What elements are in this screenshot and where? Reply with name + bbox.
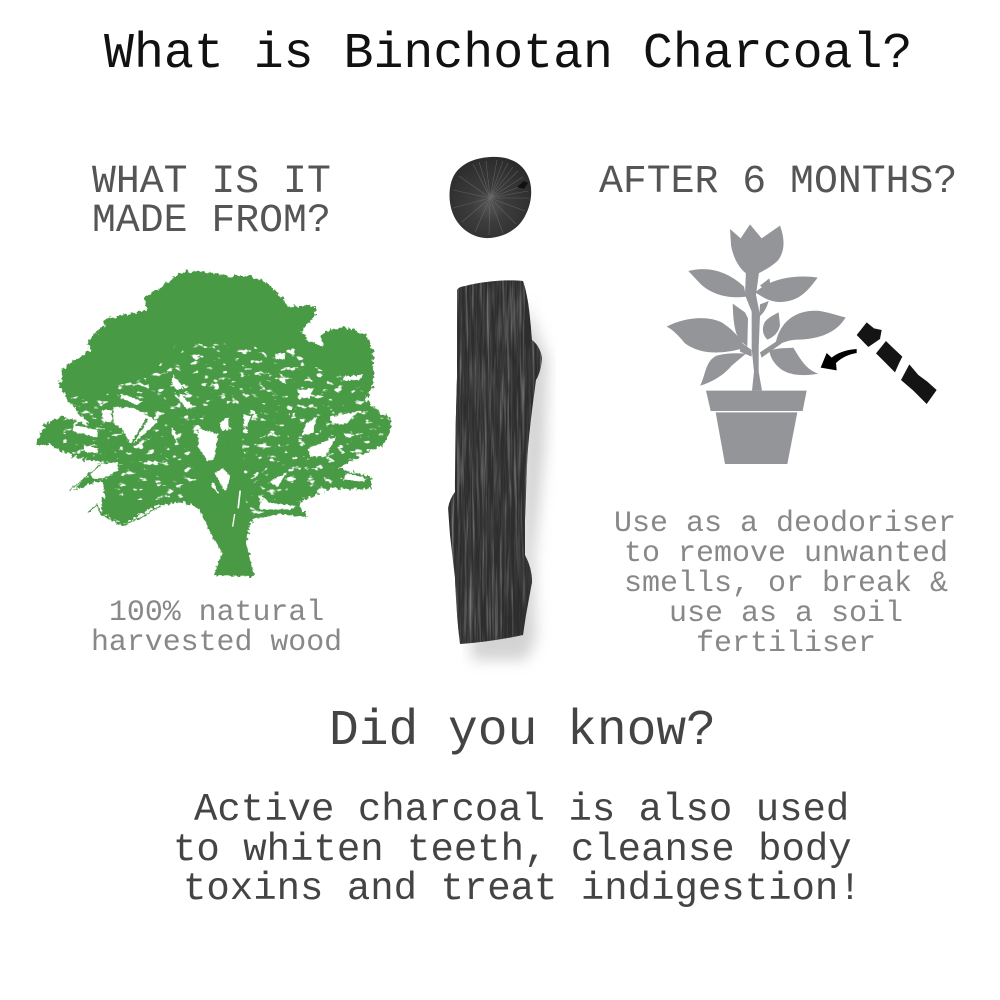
heading: did you know: Did you know? [329,703,716,759]
caption: uses after 6 months: use as a soil [669,597,903,631]
caption: natural wood [91,595,342,659]
text block: did you know fact: to whiten teeth, cleanse body [173,828,852,872]
caption: natural wood: harvested wood [91,625,342,659]
caption: uses after 6 months: smells, or break & [624,567,948,601]
plant: leaves [688,269,746,297]
plant: stem [745,270,762,391]
tree: trunk [200,507,254,576]
text block: did you know fact: Active charcoal is also used [194,788,849,832]
tree: white gaps between branches [60,328,367,527]
plant: pot body [716,412,797,464]
disc: radial rays [453,160,529,235]
heading: what is it made from: WHAT IS IT [92,159,331,204]
tree: branches over the gaps [67,400,377,525]
icon: broken charcoal pieces [857,322,937,404]
stick: wood grain [448,280,542,644]
heading: after 6 months: AFTER 6 MONTHS? [599,159,957,204]
icon: green tree [35,272,391,576]
heading: what is it made from [92,159,331,243]
stick: soft shadow [470,300,548,660]
icon: charcoal disc [450,157,531,238]
arrow: charcoal to plant [821,349,857,370]
caption: uses after 6 months: fertiliser [696,627,876,661]
caption: uses after 6 months [614,507,956,661]
text block: did you know fact: toxins and treat indigestion! [183,867,862,911]
plant: flower [730,224,784,273]
caption: natural wood: 100% natural [109,595,324,629]
icon: charcoal stick [448,280,548,660]
caption: uses after 6 months: Use as a deodoriser [614,507,956,541]
title: What is Binchotan Charcoal? [104,25,912,82]
plant: pot rim [706,391,807,411]
tree: leaf speckle texture [63,343,383,517]
caption: uses after 6 months: to remove unwanted [624,537,948,571]
icon: potted plant [667,224,846,464]
text block: did you know fact [173,788,862,911]
heading: what is it made from: MADE FROM? [92,198,331,243]
